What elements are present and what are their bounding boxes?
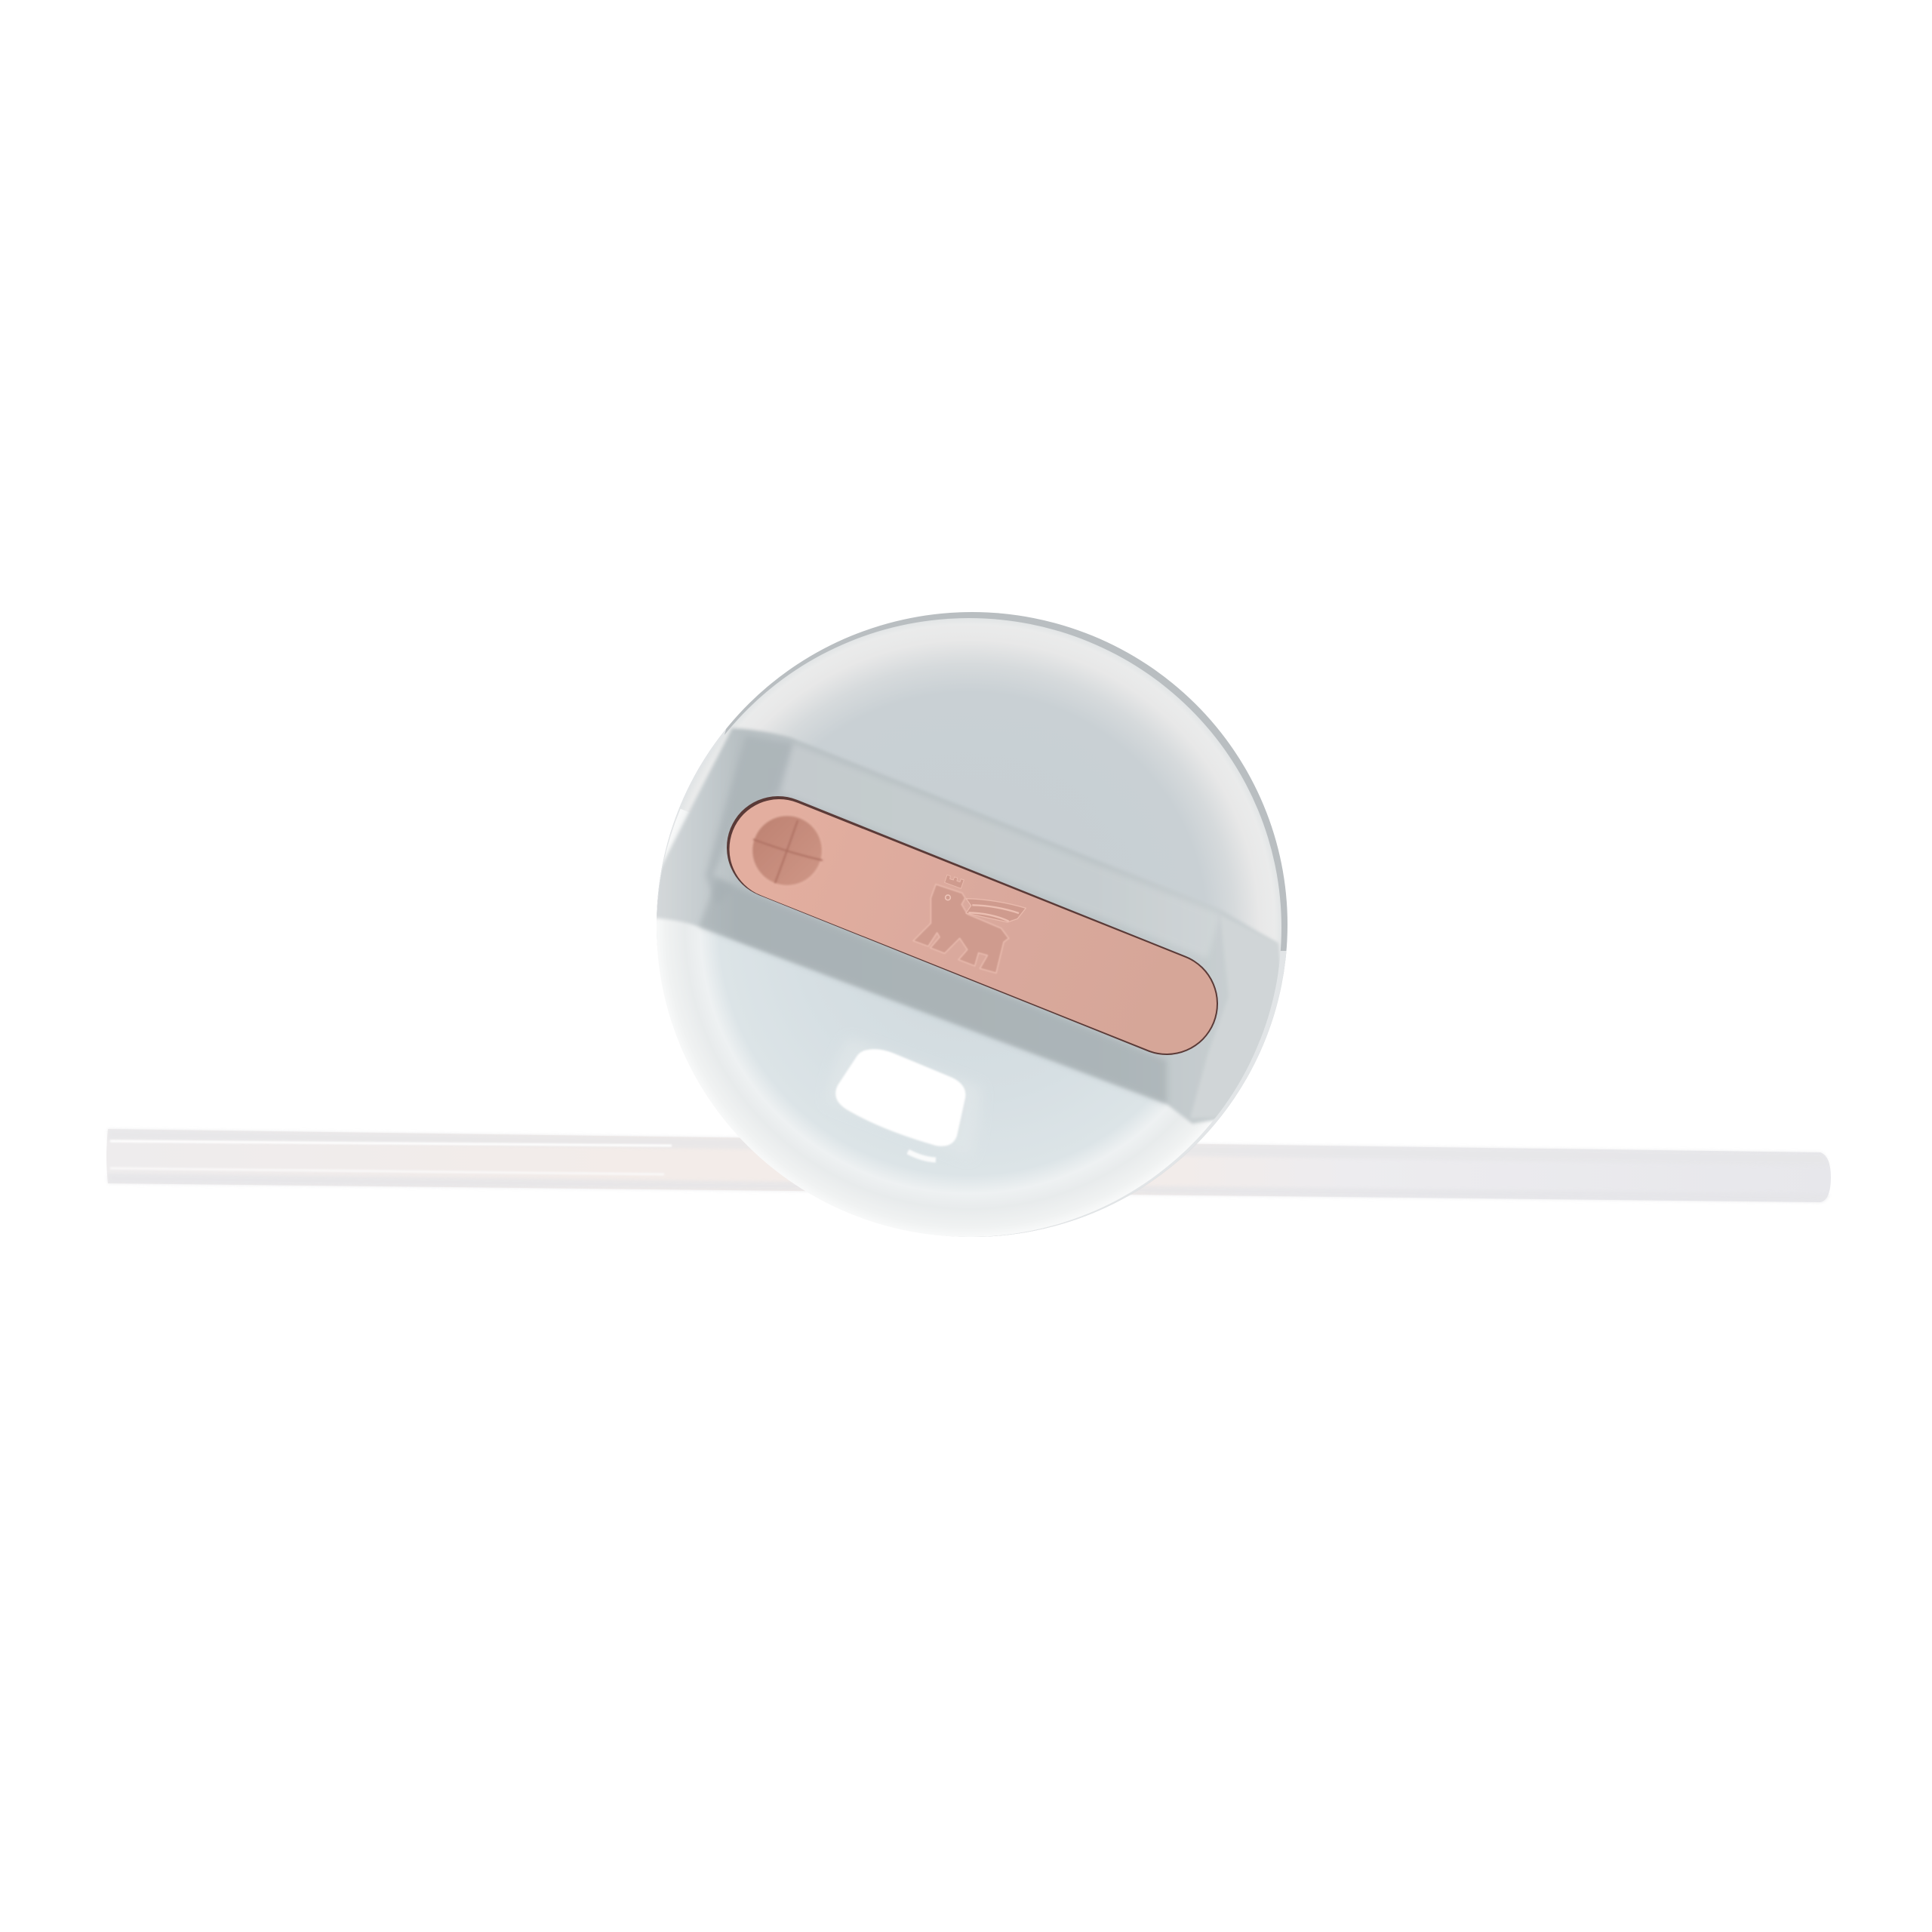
bear body — [913, 884, 1009, 973]
lid upper rim and recessed surface — [718, 618, 1281, 951]
icon: crowned winged bear logo — [913, 875, 1026, 973]
wing feathers — [968, 905, 1019, 921]
band lower strip — [699, 879, 1167, 1104]
slider face — [779, 849, 1167, 1004]
rose slider — [752, 815, 1167, 1004]
eye — [946, 895, 950, 900]
opening lip highlight — [908, 1152, 936, 1160]
band upper strip — [781, 743, 1220, 958]
slider track and opening — [649, 728, 1281, 1160]
sip opening — [835, 1049, 965, 1146]
lid lower rim and recessed surface — [657, 809, 1214, 1237]
slider dark seam — [778, 848, 1167, 1004]
slider track band — [649, 728, 1281, 1124]
lid — [649, 612, 1287, 1237]
product photo: lid with straw — [106, 612, 1831, 1237]
lid rim lower edge — [657, 729, 1286, 1237]
lid rear rim — [657, 612, 1287, 1237]
crown — [945, 875, 964, 888]
straw hole — [752, 815, 823, 886]
wing — [966, 899, 1026, 922]
left end shadow — [706, 738, 791, 891]
straw — [106, 1129, 1831, 1202]
right end facet — [1192, 919, 1230, 1117]
